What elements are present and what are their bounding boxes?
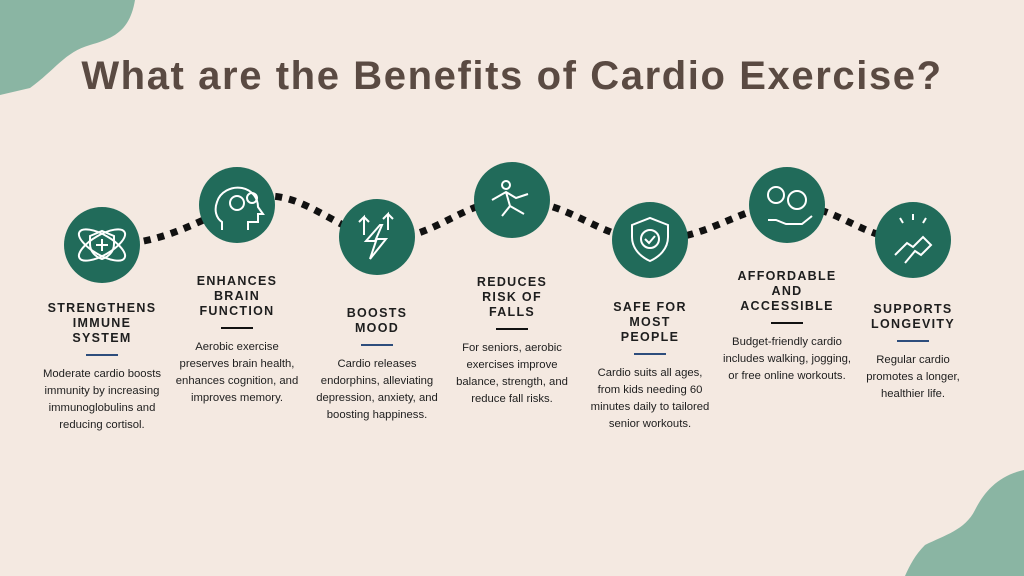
text: safe: PEOPLE — [621, 330, 679, 344]
text: longevity: SUPPORTS — [873, 302, 953, 316]
text: mood: MOOD — [355, 321, 399, 335]
text: brain: FUNCTION — [200, 304, 274, 318]
text: immune: IMMUNE — [73, 316, 131, 330]
text: safe: Cardio suits all ages, from kids needing 60 minutes daily to tailored senior workouts. — [591, 367, 709, 430]
text: affordable: AFFORDABLE — [737, 269, 837, 283]
text: affordable — [723, 269, 851, 382]
text: immune: SYSTEM — [72, 331, 132, 345]
icon: shield — [612, 202, 688, 278]
text: brain — [176, 274, 298, 404]
text: falls — [456, 275, 568, 405]
text: immune: Moderate cardio boosts immunity by increasing immunoglobulins and reducing cortisol. — [43, 368, 161, 431]
text: mood — [316, 306, 438, 421]
text: brain: BRAIN — [214, 289, 260, 303]
title: What are the Benefits of Cardio Exercise? — [81, 54, 943, 98]
text: affordable: Budget-friendly cardio includes walking, jogging, or free online workouts. — [723, 336, 851, 382]
text: affordable: AND — [772, 284, 802, 298]
text: safe: MOST — [629, 315, 671, 329]
text: longevity: LONGEVITY — [871, 317, 955, 331]
text: safe: SAFE FOR — [613, 300, 687, 314]
text: immune — [43, 301, 161, 431]
text: brain: ENHANCES — [197, 274, 277, 288]
text: longevity: Regular cardio promotes a longer, healthier life. — [866, 354, 960, 400]
icon: affordable — [749, 167, 825, 243]
text: brain: Aerobic exercise preserves brain health, enhances cognition, and improves memory. — [176, 341, 298, 404]
text: mood: Cardio releases endorphins, alleviating depression, anxiety, and boosting happiness. — [316, 358, 438, 421]
text: affordable: ACCESSIBLE — [740, 299, 834, 313]
text: falls: REDUCES — [477, 275, 547, 289]
text: longevity — [866, 302, 960, 400]
text: immune: STRENGTHENS — [48, 301, 156, 315]
icon: mood — [339, 199, 415, 275]
icon: longevity — [875, 202, 951, 278]
text: mood: BOOSTS — [347, 306, 407, 320]
text: falls: RISK OF — [482, 290, 542, 304]
text: falls: FALLS — [489, 305, 535, 319]
icon: brain — [199, 167, 275, 243]
icon: falls — [474, 162, 550, 238]
icon: immune — [64, 207, 140, 283]
text: falls: For seniors, aerobic exercises improve balance, strength, and reduce fall risks. — [456, 342, 568, 405]
text: safe — [591, 300, 709, 430]
